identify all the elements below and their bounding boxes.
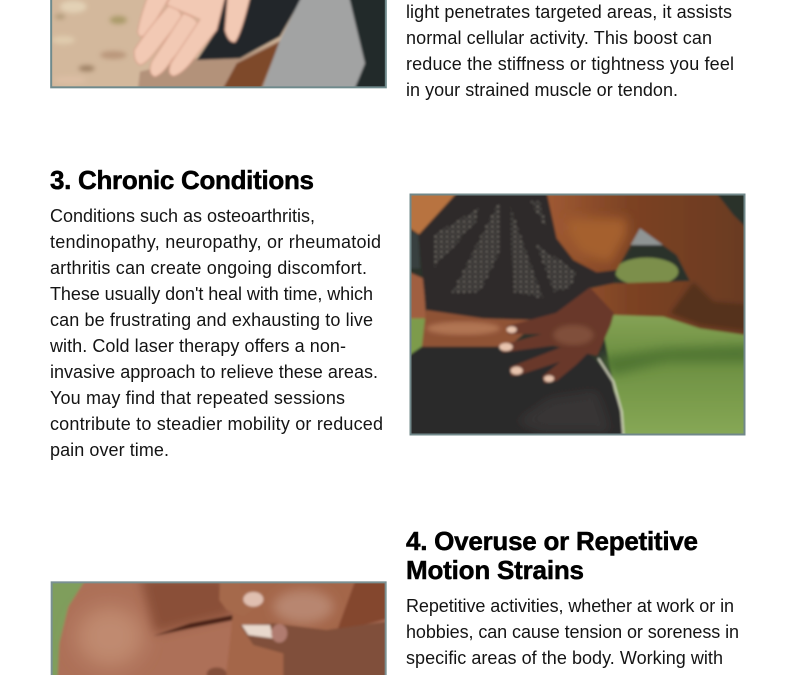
upper back left [412,196,458,236]
grey patch behind arm [627,228,663,245]
photo painting [52,583,385,675]
midriff [422,310,540,348]
thigh skin [56,583,385,675]
photo painting [412,196,744,434]
thigh highlight [77,607,143,667]
text: chronic conditions paragraph [49,206,383,460]
thumb and hand [240,620,397,675]
text: section 2 closing paragraph [406,2,734,100]
photo background: blurred sandy ground [52,0,292,86]
hand highlight [553,325,593,345]
heading: 4. Overuse or Repetitive Motion Strains: 4. Overuse or Repetitive [406,526,698,556]
calf [226,584,354,675]
green background corner [52,583,84,675]
upper thigh shade [140,577,233,633]
fingernails [499,326,554,382]
text: section 2 closing paragraph: normal cellular activity. This boost can [406,28,712,48]
sports bra [418,196,618,299]
left arm strip [412,271,428,320]
photo: hands massaging knee [50,581,387,675]
dark hedge background [412,196,744,391]
shoulder highlight [567,218,627,263]
upper fingertip [219,577,264,616]
photo frame [410,194,744,434]
text: chronic conditions paragraph: contribute to steadier mobility or reduced [50,414,383,434]
text: chronic conditions paragraph: Conditions such as osteoarthritis, [50,206,315,226]
heading: 4. Overuse or Repetitive Motion Strains: Motion Strains [406,555,584,585]
text: chronic conditions paragraph: invasive approach to relieve these areas. [50,362,378,382]
text: overuse paragraph: Repetitive activities, whether at work or in [406,596,734,616]
shoulder and arm [545,196,744,336]
text: overuse paragraph: specific areas of the body. Working with [406,648,723,668]
left grass strip [412,316,426,356]
small finger at bottom [207,667,227,675]
heading: 4. Overuse or Repetitive Motion Strains [406,526,698,585]
bush behind arm [615,258,678,286]
ground blotches [53,0,128,74]
dark right leg [338,583,385,630]
knee skin [138,40,280,86]
text: chronic conditions paragraph: can be frustrating and exhausting to live [50,310,373,330]
leggings outline [598,358,624,445]
text: chronic conditions paragraph: with. Cold laser therapy offers a non- [49,336,346,356]
hand palm and fingers [134,0,252,77]
grass lawn [603,313,744,434]
text: chronic conditions paragraph: These usually don't heal with time, which [50,284,373,304]
photo painting [52,0,385,86]
bra mesh panels [433,200,577,298]
text: section 2 closing paragraph: reduce the stiffness or tightness you feel [406,54,734,74]
text: chronic conditions paragraph: tendinopathy, neuropathy, or rheumatoid [50,232,381,252]
leggings [412,345,624,434]
leggings highlight [527,395,604,430]
text: overuse paragraph [406,596,739,668]
text: section 2 closing paragraph: light penetrates targeted areas, it assists [406,2,732,22]
grey shorts [262,0,367,86]
photo frame [52,582,386,675]
dark background right [348,0,385,86]
heading: 3. Chronic Conditions: 3. Chronic Conditions [50,165,314,195]
text: chronic conditions paragraph: You may find that repeated sessions [50,388,345,408]
hand on hip [499,288,613,382]
text: overuse paragraph: hobbies, can cause tension or soreness in [406,622,739,642]
photo frame [51,0,386,87]
text: chronic conditions paragraph: pain over time. [50,440,169,460]
photo: hand held out over knee [50,0,387,88]
photo: woman holding lower back [410,194,746,436]
crease [153,615,233,636]
lawn shadow [600,345,757,375]
text: chronic conditions paragraph: arthritis can create ongoing discomfort. [50,258,367,278]
dark sleeve [197,0,308,60]
arm shadow [670,282,744,330]
text: section 2 closing paragraph: in your strained muscle or tendon. [406,80,678,100]
